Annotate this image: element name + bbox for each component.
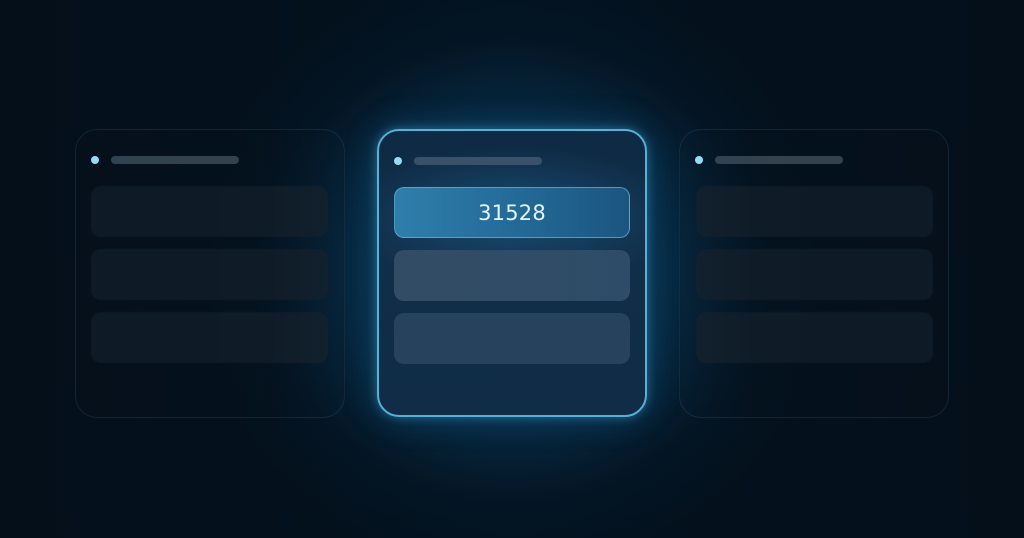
panel: right card [679,129,949,418]
right card status dot [695,156,703,164]
panel: centre highlighted card [377,129,647,417]
centre card status dot [394,157,402,165]
left card title placeholder [111,156,239,164]
right card row 1 [696,186,933,237]
centre card row 2 [394,250,630,301]
left card status dot [91,156,99,164]
right card title placeholder [715,156,843,164]
centre card title placeholder [414,157,542,165]
left card row 3 [91,312,328,363]
centre card row 3 [394,313,630,364]
panel: left card [75,129,345,418]
left card row 2 [91,249,328,300]
right card row 3 [696,312,933,363]
left card row 1 [91,186,328,237]
highlighted value row [394,187,630,238]
right card row 2 [696,249,933,300]
highlighted value row: 31528 [478,201,546,225]
